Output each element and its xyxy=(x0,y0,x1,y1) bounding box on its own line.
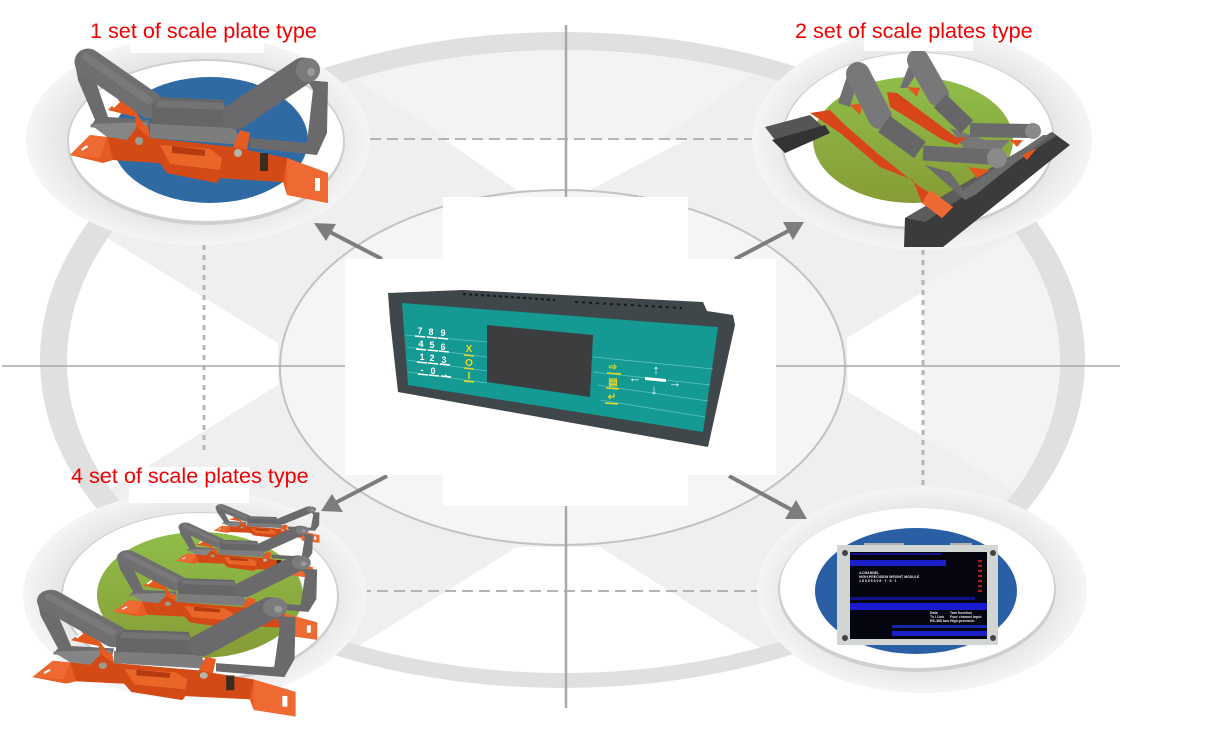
central controller device xyxy=(388,290,735,447)
front rollers xyxy=(858,74,1007,168)
display module xyxy=(837,543,998,645)
numeric keypad: 5 xyxy=(429,340,435,350)
function keys: ▤ xyxy=(608,377,618,388)
numeric keypad: . xyxy=(445,368,447,378)
module screen text: RS-485 bus xyxy=(930,619,949,623)
rear-left channel beam xyxy=(765,115,830,153)
module screen text: High-precision xyxy=(950,619,975,623)
front channel beam xyxy=(904,132,1070,247)
arms xyxy=(838,73,857,107)
module screen text: 4-CHANNEL xyxy=(859,571,880,575)
direction keys: ↑ xyxy=(653,362,659,377)
function keys: I xyxy=(468,371,471,382)
function keys: X xyxy=(466,344,473,355)
background: large ring diagram xyxy=(30,32,1090,700)
idler: 1 set of scale plate type xyxy=(70,57,328,203)
module screen text: 1 8 0 8 5 8 0 8 · 7 · 9 · 1 xyxy=(859,579,897,583)
function keys: ↵ xyxy=(608,392,616,403)
numeric keypad: - xyxy=(420,365,424,375)
numeric keypad: 4 xyxy=(418,339,424,349)
module screen text: Tare function xyxy=(950,611,972,615)
numeric keypad: 9 xyxy=(440,328,446,338)
label: 4 set xyxy=(71,463,309,503)
label: 1 set: 1 set of scale plate type xyxy=(90,18,317,43)
disc: bottom left xyxy=(23,490,367,700)
numeric keypad: 3 xyxy=(441,355,447,365)
label: 2 set: 2 set of scale plates type xyxy=(795,18,1033,43)
arrow: to display module xyxy=(729,476,807,519)
arrow: to 1 set xyxy=(314,223,382,259)
direction keys xyxy=(628,362,682,397)
module screen text: Tx / Link xyxy=(930,615,944,619)
function keys xyxy=(464,344,621,404)
arrow: to 2 set xyxy=(735,222,804,259)
device screen xyxy=(487,325,593,397)
disc: top left xyxy=(26,35,370,245)
rear rollers xyxy=(918,60,1041,139)
idler: 2 set of scale plates type xyxy=(765,60,1070,247)
numeric keypad xyxy=(415,326,451,378)
gray cross frames xyxy=(925,135,1050,200)
center ellipse xyxy=(280,190,845,545)
direction keys: ← xyxy=(628,370,642,385)
numeric keypad: 0 xyxy=(430,366,436,376)
direction keys: → xyxy=(668,375,682,390)
numeric keypad: 7 xyxy=(417,326,423,336)
idler: 4 set of scale plates type xyxy=(32,506,319,716)
label: 4 set: 4 set of scale plates type xyxy=(71,463,309,488)
numeric keypad: 6 xyxy=(440,342,446,352)
arrow: to 4 set xyxy=(321,476,387,512)
module screen text xyxy=(859,571,982,623)
module screen text: HIGH-PRECISION WEIGHT MODULE xyxy=(859,575,920,579)
module screen text: Four channel input xyxy=(950,615,982,619)
numeric keypad: 1 xyxy=(419,352,425,362)
disc: bottom right xyxy=(757,487,1087,693)
direction keys: ↓ xyxy=(651,382,657,397)
function keys: O xyxy=(465,358,473,369)
central white backing panel xyxy=(345,197,776,506)
module screen text: Data xyxy=(930,611,938,615)
orange strips xyxy=(887,92,967,145)
disc: top right xyxy=(752,30,1092,250)
numeric keypad: 8 xyxy=(428,327,434,337)
function keys: ⇨ xyxy=(609,362,618,373)
numeric keypad: 2 xyxy=(429,353,435,363)
